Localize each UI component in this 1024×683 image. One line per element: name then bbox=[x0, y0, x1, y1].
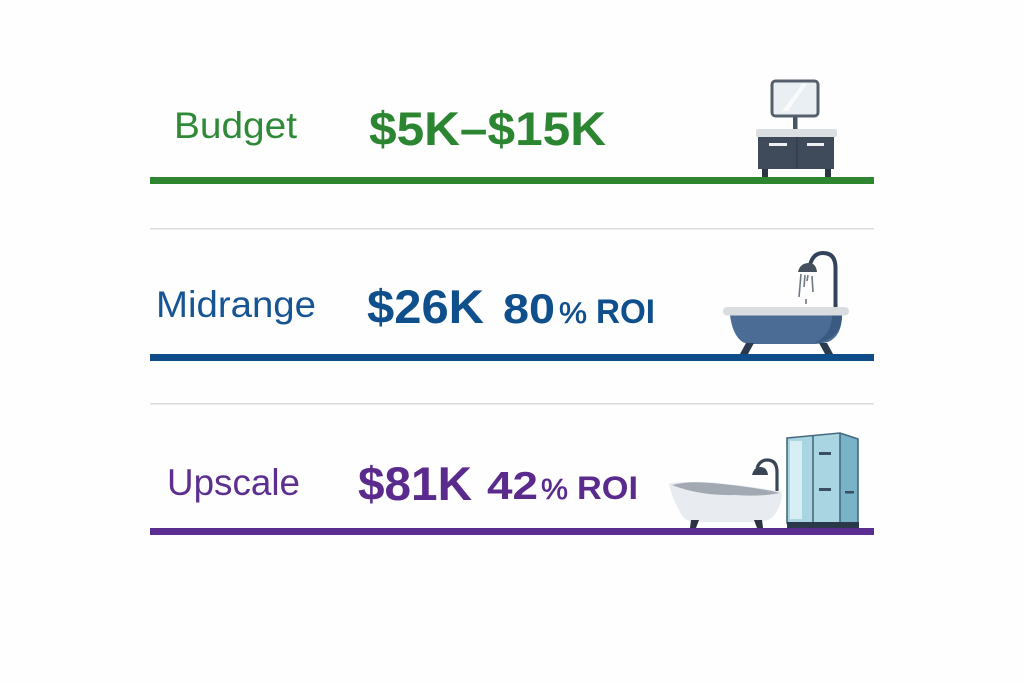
upscale baseline bar bbox=[150, 528, 874, 535]
panel: midrange tier bbox=[150, 253, 874, 361]
budget baseline bar bbox=[150, 177, 874, 184]
midrange price: $26K bbox=[367, 280, 484, 333]
icon: freestanding tub bbox=[669, 460, 782, 528]
midrange baseline bar bbox=[150, 354, 874, 361]
divider bbox=[150, 228, 874, 230]
upscale ROI bbox=[487, 465, 638, 508]
panel: upscale tier bbox=[150, 433, 874, 535]
midrange ROI: % bbox=[559, 297, 587, 330]
divider bbox=[150, 403, 874, 404]
icon: glass shower cabinet bbox=[787, 433, 859, 528]
panel: budget tier bbox=[150, 81, 874, 184]
midrange ROI: ROI bbox=[596, 293, 655, 331]
midrange ROI bbox=[503, 285, 655, 332]
upscale ROI: 42 bbox=[487, 465, 538, 508]
budget price: $5K–$15K bbox=[369, 102, 606, 155]
icon: vanity with mirror bbox=[756, 81, 837, 177]
budget label: Budget bbox=[174, 105, 298, 146]
upscale ROI: ROI bbox=[577, 470, 638, 506]
midrange label: Midrange bbox=[156, 284, 316, 325]
upscale price: $81K bbox=[358, 457, 472, 510]
upscale label: Upscale bbox=[167, 462, 300, 503]
upscale ROI: % bbox=[541, 474, 568, 506]
icon: bathtub with shower bbox=[723, 253, 849, 354]
midrange ROI: 80 bbox=[503, 285, 555, 332]
